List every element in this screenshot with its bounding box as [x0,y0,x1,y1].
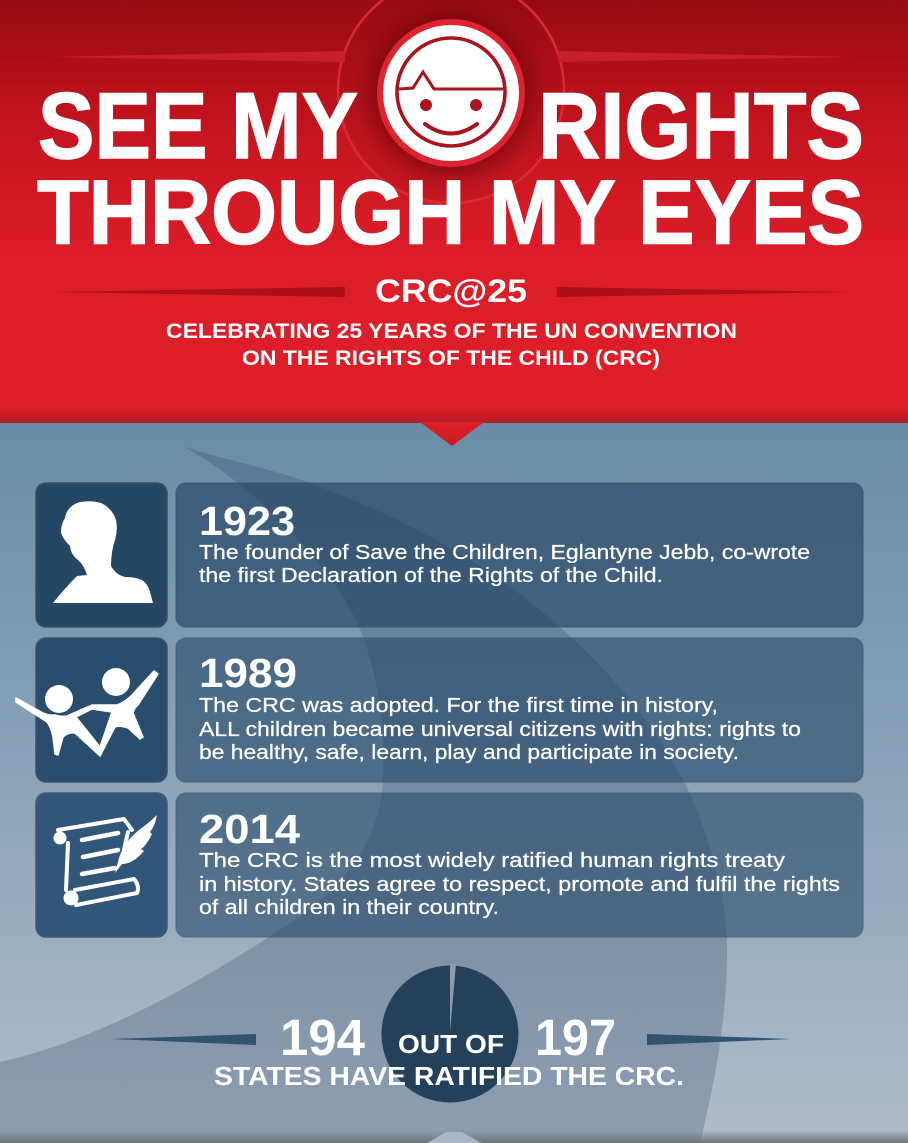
subtitle description: CELEBRATING 25 YEARS OF THE UN CONVENTION [166,320,737,343]
text card: 2014: in history. States agree to respect, promote and fulfil the rights [199,874,840,896]
icon tile: Eglantyne Jebb silhouette [36,483,167,627]
text card: 1989: be healthy, safe, learn, play and participate in society. [199,742,739,764]
text card: 2014: The CRC is the most widely ratified human rights treaty [199,850,785,872]
subtitle description [166,320,737,370]
icon tile: scroll and quill [36,793,167,937]
red header panel [0,0,908,446]
text card: 1989: The CRC was adopted. For the first time in history, [199,695,718,717]
title: THROUGH MY EYES [37,162,864,264]
blue lower background [0,423,908,1143]
statistic callout: STATES HAVE RATIFIED THE CRC. [214,1061,684,1091]
title: SEE MY [38,73,358,178]
subtitle: CRC@25 [52,273,850,309]
decorative crescent swoosh [0,447,727,1143]
subtitle description: ON THE RIGHTS OF THE CHILD (CRC) [242,347,660,370]
title [37,73,864,264]
title: RIGHTS [538,73,864,178]
icon tile: two children holding hands [16,638,167,782]
panel: 1923 [36,483,863,627]
statistic callout: 194 [280,1009,366,1066]
statistic callout: OUT OF [398,1029,504,1059]
subtitle: CRC@25: CRC@25 [375,273,527,309]
text card: 1923 [176,483,863,627]
panel: 1989 [16,638,863,782]
text card: 1989: 1989 [199,650,297,696]
text card: 1923: 1923 [199,498,295,544]
statistic callout: 197 [535,1009,616,1066]
icon: smiling child face logo [377,19,525,167]
text card: 2014 [176,793,863,937]
text card: 2014: of all children in their country. [199,897,499,919]
text card: 1923: the first Declaration of the Rights of the Child. [199,565,663,587]
text card: 1923: The founder of Save the Children, Eglantyne Jebb, co-wrote [199,542,810,564]
statistic callout [111,1009,791,1091]
text card: 1989: ALL children became universal citizens with rights: rights to [199,719,801,741]
bottom edge strip [0,1130,908,1143]
pie chart: 194 of 197 [382,964,518,1102]
text card: 1989 [176,638,863,782]
panel: 2014 [36,793,863,937]
text card: 2014: 2014 [199,806,300,852]
